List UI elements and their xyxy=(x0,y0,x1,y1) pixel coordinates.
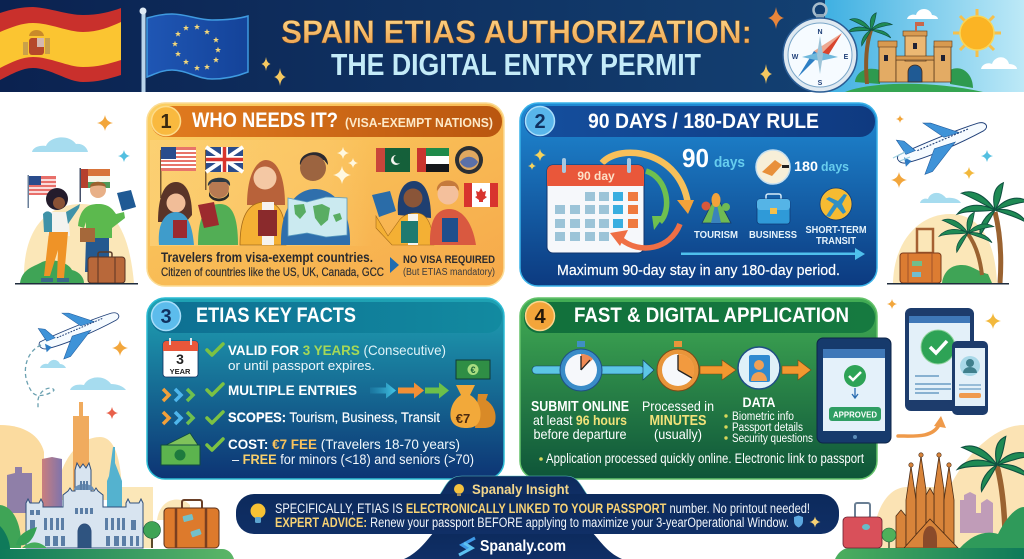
panel 1: who needs it xyxy=(147,103,504,286)
transit label: TRANSIT xyxy=(816,236,856,247)
entry arrows xyxy=(370,382,449,398)
calendar icon: YEAR xyxy=(170,367,191,376)
processed step: MINUTES xyxy=(650,413,707,429)
cost fact xyxy=(228,437,474,467)
timeline arrow xyxy=(681,248,865,260)
woman xyxy=(41,188,80,282)
data step: Biometric info xyxy=(732,411,794,423)
orange arrow to devices xyxy=(898,416,946,436)
flags xyxy=(28,168,110,208)
180 days: days xyxy=(821,159,849,174)
blue arrow marker xyxy=(390,257,399,273)
panel 2 heading: 90 DAYS / 180-DAY RULE xyxy=(588,110,819,133)
panel 3 heading: ETIAS KEY FACTS xyxy=(196,304,356,327)
data icon xyxy=(738,347,780,389)
compass: W xyxy=(792,54,799,61)
banknote icon xyxy=(161,433,200,465)
transit label: SHORT-TERM xyxy=(806,225,866,236)
data step: Security questions xyxy=(732,433,813,445)
valid for fact: or until passport expires. xyxy=(228,358,375,373)
90 days: 90 xyxy=(682,143,709,173)
90 days xyxy=(682,143,745,173)
shield and sparkle xyxy=(794,516,820,528)
US flag xyxy=(160,147,196,198)
panel 4 header bar xyxy=(524,302,875,333)
multiple entries fact: MULTIPLE ENTRIES xyxy=(228,382,357,398)
sparkles xyxy=(97,115,130,162)
insight line 2: EXPERT ADVICE: Renew your passport BEFORE applying to maximize your 3-yearOperational Window. xyxy=(275,515,789,530)
traveler: girl xyxy=(158,182,194,245)
no visa note xyxy=(403,254,495,278)
backdrop xyxy=(24,204,134,283)
compass: S xyxy=(818,80,823,87)
compass: E xyxy=(844,54,849,61)
panel 2 number badge xyxy=(526,106,554,136)
traveler: man with world map xyxy=(281,152,350,245)
insight callout xyxy=(236,476,839,559)
panel 1 heading: WHO NEEDS IT? xyxy=(192,109,338,132)
palace xyxy=(26,463,143,548)
stopwatch 1 xyxy=(560,341,602,391)
cost fact: COST: €7 FEE (Travelers 18-70 years) xyxy=(228,437,460,452)
money bags xyxy=(450,385,496,428)
panel 2 header bar xyxy=(524,106,875,137)
Spain flag xyxy=(0,7,121,82)
insight heading: Spanaly Insight xyxy=(472,481,569,497)
left illustration: plane xyxy=(25,313,128,419)
180 days icon xyxy=(756,150,790,184)
scopes fact: SCOPES: Tourism, Business, Transit xyxy=(228,410,440,425)
man xyxy=(78,182,136,272)
UK flag xyxy=(205,147,243,190)
ground line xyxy=(15,283,138,284)
cloud xyxy=(32,137,88,152)
no visa note: (But ETIAS mandatory) xyxy=(403,267,495,278)
data step xyxy=(724,394,813,445)
Spanaly logo: Spanaly.com xyxy=(480,538,566,555)
calendar icon: 3 xyxy=(176,351,184,367)
business icon xyxy=(757,194,790,224)
compass: N xyxy=(817,29,823,36)
title: SPAIN ETIAS AUTHORIZATION: xyxy=(281,14,752,50)
sparkles xyxy=(528,149,546,170)
submit online step xyxy=(531,399,629,442)
title xyxy=(281,14,752,82)
transit icon xyxy=(820,188,852,220)
orange arrow 2 xyxy=(782,360,811,380)
small clouds xyxy=(40,360,126,390)
Canada flag xyxy=(464,183,498,207)
panel 3 header bar xyxy=(151,302,502,333)
right illustration: suitcase and palms xyxy=(887,183,1024,284)
bulb icon xyxy=(250,504,266,523)
tourism icon xyxy=(702,193,731,223)
right illustration: plane and stars xyxy=(891,115,993,188)
calendar icon xyxy=(163,338,198,377)
bottom right suitcase and tree xyxy=(843,503,896,548)
tablet approved: APPROVED xyxy=(833,410,877,420)
insight line 1: SPECIFICALLY, ETIAS IS ELECTRONICALLY LINKED TO YOUR PASSPORT number. No printout needed! xyxy=(275,501,810,516)
EU flag with pole xyxy=(140,8,248,92)
Pakistan flag xyxy=(376,148,410,172)
calendar: 90 day xyxy=(577,169,615,183)
sun xyxy=(953,9,1001,57)
processed step: Processed in xyxy=(642,398,714,414)
panel 4: fast and digital application xyxy=(520,298,877,479)
blue timeline arrow xyxy=(532,360,654,380)
panel 4 heading: FAST & DIGITAL APPLICATION xyxy=(574,304,849,327)
yellow cycle arrow xyxy=(602,153,694,214)
subtitle: THE DIGITAL ENTRY PERMIT xyxy=(331,47,701,82)
UAE flag xyxy=(417,148,449,172)
submit online step: SUBMIT ONLINE xyxy=(531,399,629,415)
traveler: woman with passport xyxy=(372,181,434,245)
panel 1 heading note: (VISA-EXEMPT NATIONS) xyxy=(345,115,493,130)
header sparkles xyxy=(262,7,784,86)
180 days xyxy=(794,158,849,174)
right illustration: Sagrada Familia and palm xyxy=(872,425,1024,548)
panel 2 number badge: 2 xyxy=(534,111,546,133)
world map xyxy=(288,197,347,237)
traveler: man in red xyxy=(430,180,476,245)
chevrons row 2 xyxy=(163,412,193,424)
stars xyxy=(112,340,128,356)
no visa note: NO VISA REQUIRED xyxy=(403,254,495,266)
scene backdrop xyxy=(150,140,372,246)
dashed flight path xyxy=(25,345,54,410)
ground, right xyxy=(835,548,1024,559)
ground and leaves, left xyxy=(0,505,234,559)
panel 2: 90/180-day rule xyxy=(520,103,877,286)
island, castle, palm xyxy=(845,13,983,92)
GCC emblem xyxy=(455,146,483,174)
valid for fact xyxy=(228,342,446,373)
panel 4 number badge xyxy=(526,302,554,330)
panel 4 footer: Application processed quickly online. Electronic link to passport xyxy=(546,451,864,466)
panel 1 body text: Travelers from visa-exempt countries. xyxy=(161,250,373,265)
left illustration: Madrid city skyline xyxy=(0,402,190,548)
valid for fact: VALID FOR 3 YEARS (Consecutive) xyxy=(228,342,446,358)
clouds in sky xyxy=(907,9,1017,69)
panel 2 caption: Maximum 90-day stay in any 180-day period. xyxy=(557,262,840,279)
processed step xyxy=(642,398,714,442)
small banknote xyxy=(456,360,490,379)
sky background xyxy=(825,0,1024,92)
panel 4 number badge: 4 xyxy=(534,306,546,328)
processed step: (usually) xyxy=(654,426,702,442)
panel 1 number badge xyxy=(152,106,180,136)
bush xyxy=(20,260,84,283)
money bags: €7 xyxy=(456,411,470,426)
data step: DATA xyxy=(742,394,776,410)
white sparkles xyxy=(333,147,358,184)
submit online step: at least 96 hours xyxy=(533,412,627,428)
right illustration: tablet and phone xyxy=(887,299,1001,415)
data step: Passport details xyxy=(732,422,803,434)
submit online step: before departure xyxy=(534,426,627,442)
suitcase xyxy=(88,252,125,283)
stopwatch 2 xyxy=(657,341,699,391)
red cycle arrow xyxy=(610,224,680,248)
traveler: man with passport xyxy=(198,178,238,245)
panel 1 number badge: 1 xyxy=(160,111,172,133)
transit label xyxy=(806,225,866,247)
calendar xyxy=(547,158,644,253)
traveler: woman xyxy=(240,160,286,245)
coat of arms xyxy=(23,30,50,55)
left illustration: travelers with flags xyxy=(15,115,138,284)
panel 1 body text xyxy=(161,250,384,279)
panel 3 number badge xyxy=(152,302,180,330)
tourism label: TOURISM xyxy=(694,230,738,241)
tablet approved xyxy=(817,338,891,443)
panel 3 number badge: 3 xyxy=(160,306,172,328)
green cycle arrow xyxy=(646,171,667,230)
compass xyxy=(783,4,857,92)
panel 1 header bar xyxy=(151,106,502,137)
small banknote: € xyxy=(470,365,476,375)
bottom left suitcase and tree xyxy=(144,500,219,548)
orange arrow 1 xyxy=(700,360,736,380)
check marks xyxy=(207,344,223,450)
cost fact: – FREE for minors (<18) and seniors (>70) xyxy=(232,452,474,467)
business label: BUSINESS xyxy=(749,230,797,241)
panel 1 body text: Citizen of countries like the US, UK, Canada, GCC xyxy=(161,265,384,279)
header banner xyxy=(0,0,1024,92)
90 days: days xyxy=(714,154,745,171)
180 days: 180 xyxy=(794,158,818,174)
chevrons row 1 xyxy=(163,389,193,401)
panel 3: key facts xyxy=(147,298,504,479)
